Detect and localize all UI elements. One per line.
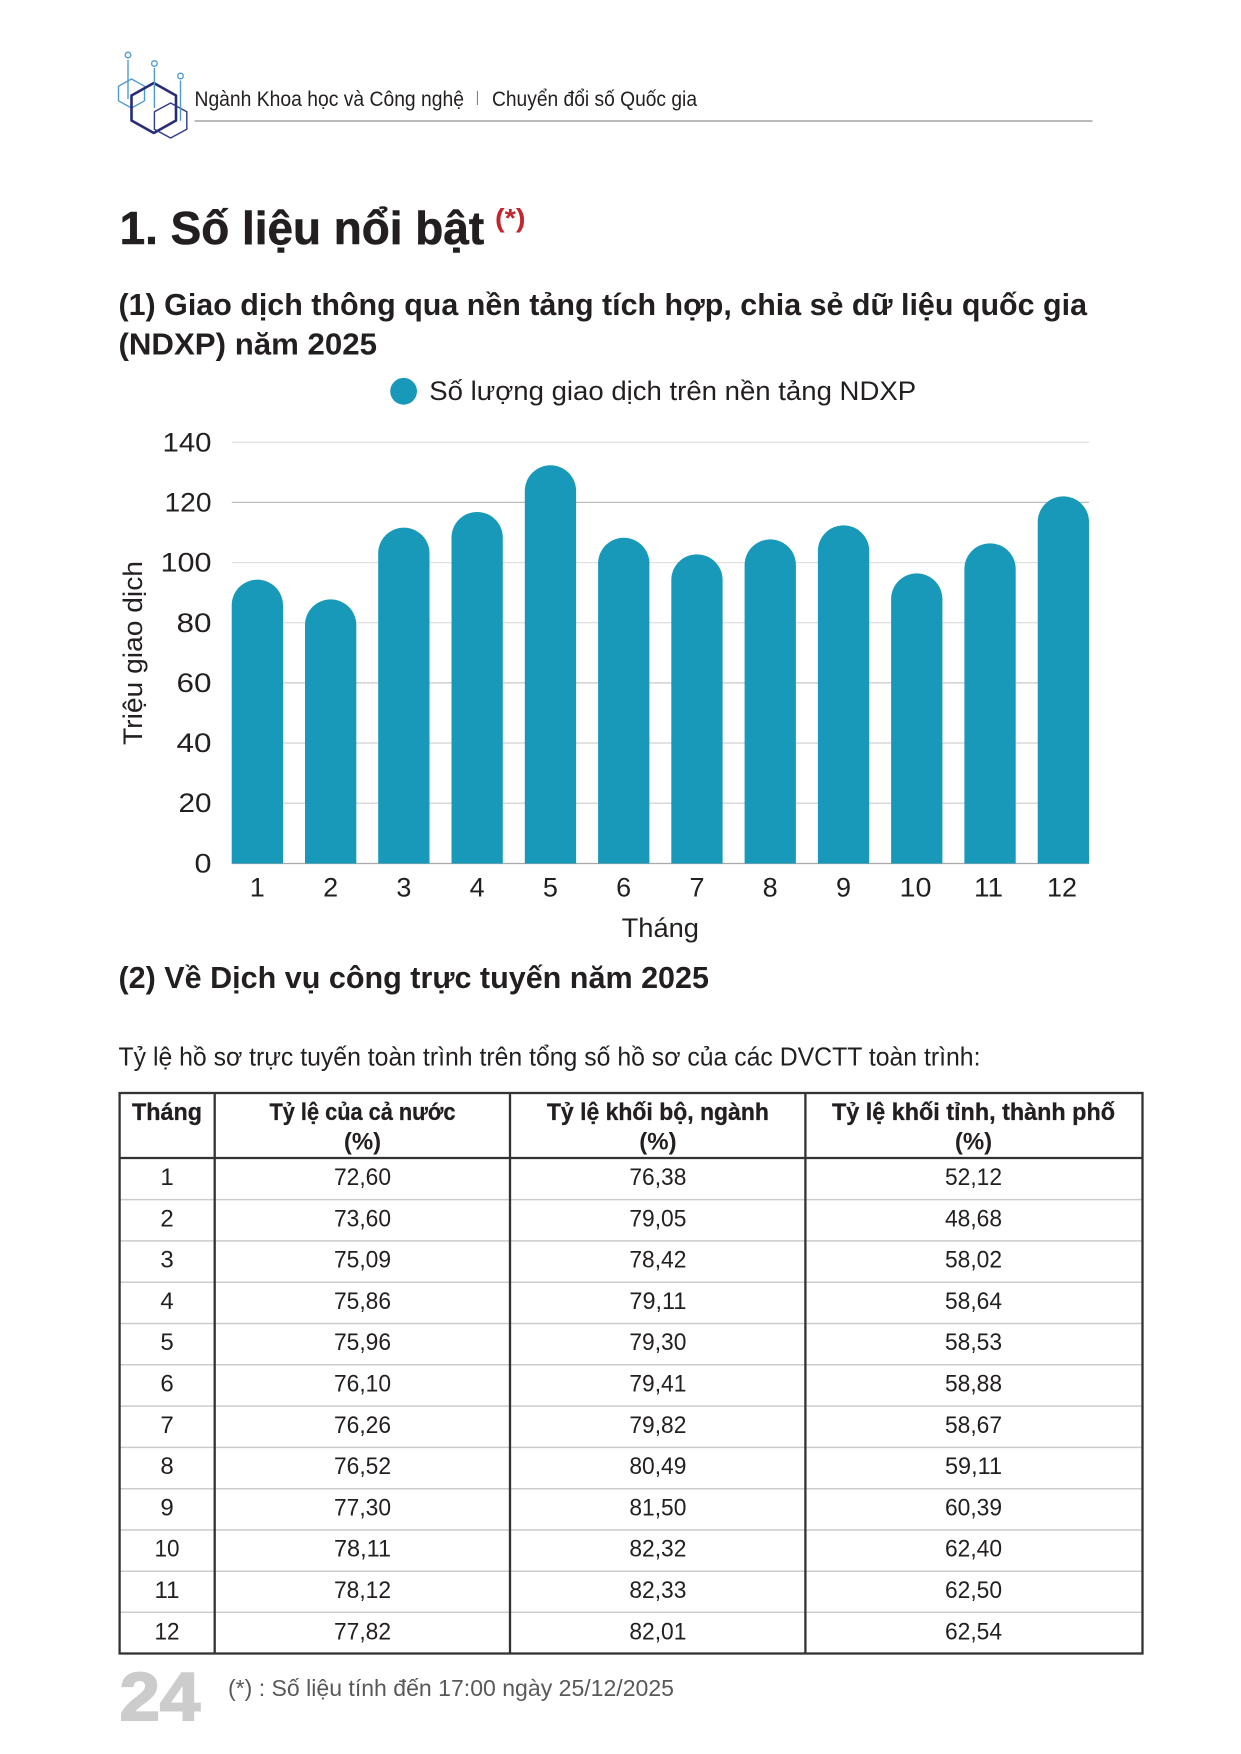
x axis labels: 10 bbox=[900, 872, 932, 902]
table header: Tỷ lệ khối bộ, ngành bbox=[547, 1099, 769, 1126]
table rows: 58,88 bbox=[945, 1370, 1002, 1398]
x axis labels: 1 bbox=[250, 872, 265, 902]
table rows: 58,67 bbox=[945, 1412, 1002, 1439]
y axis labels: 0 bbox=[194, 848, 212, 878]
table rows: 75,86 bbox=[334, 1288, 391, 1315]
table rows: 62,54 bbox=[945, 1618, 1002, 1645]
x axis labels: 4 bbox=[470, 872, 485, 902]
table header: Tỷ lệ khối tỉnh, thành phố bbox=[832, 1099, 1115, 1126]
table rows: 62,40 bbox=[945, 1536, 1002, 1563]
title: 1. Số liệu nổi bật bbox=[120, 202, 484, 254]
header text: sector: Ngành Khoa học và Công nghệ bbox=[194, 88, 464, 111]
x axis labels: 9 bbox=[836, 872, 851, 902]
table rows: 12 bbox=[154, 1618, 180, 1645]
table rows: 76,10 bbox=[334, 1370, 391, 1398]
table rows: 59,11 bbox=[945, 1453, 1002, 1480]
table rows: 82,33 bbox=[629, 1577, 686, 1604]
x axis title: Tháng bbox=[622, 913, 699, 943]
y axis labels: 100 bbox=[160, 548, 212, 578]
table rows: 9 bbox=[160, 1494, 174, 1521]
x axis labels: 6 bbox=[616, 872, 631, 902]
table rows: 75,96 bbox=[334, 1329, 391, 1356]
y axis labels: 40 bbox=[176, 728, 212, 758]
table rows: 80,49 bbox=[629, 1453, 686, 1480]
header bbox=[118, 52, 1092, 138]
table rows: 79,05 bbox=[629, 1205, 686, 1232]
x axis labels: 11 bbox=[974, 872, 1003, 902]
table rows: 78,12 bbox=[334, 1577, 391, 1604]
table rows: 8 bbox=[160, 1453, 174, 1480]
y axis labels: 20 bbox=[178, 788, 212, 818]
table rows: 60,39 bbox=[945, 1494, 1002, 1521]
footnote: (*) : Số liệu tính đến 17:00 ngày 25/12/2025 bbox=[228, 1675, 674, 1701]
heading: NDXP transactions: (NDXP) năm 2025 bbox=[118, 326, 377, 362]
table header: (%) bbox=[639, 1128, 677, 1156]
table rows: 82,32 bbox=[629, 1536, 686, 1563]
heading: online public services: (2) Về Dịch vụ công trực tuyến năm 2025 bbox=[118, 960, 709, 995]
table rows: 62,50 bbox=[945, 1577, 1002, 1604]
table rows: 75,09 bbox=[334, 1247, 391, 1274]
table rows: 76,26 bbox=[334, 1412, 391, 1439]
y axis labels: 140 bbox=[162, 428, 212, 458]
x axis labels bbox=[250, 872, 1077, 902]
table rows: 76,38 bbox=[629, 1164, 686, 1191]
bars bbox=[232, 465, 1089, 864]
table rows: 7 bbox=[160, 1412, 174, 1439]
table rows: 79,82 bbox=[629, 1412, 686, 1439]
table rows: 1 bbox=[160, 1164, 174, 1191]
heading: NDXP transactions: (1) Giao dịch thông qua nền tảng tích hợp, chia sẻ dữ liệu quốc gia bbox=[118, 287, 1088, 322]
table rows: 4 bbox=[160, 1288, 174, 1315]
y axis labels: 120 bbox=[164, 488, 212, 518]
table rows: 3 bbox=[160, 1247, 174, 1274]
table rows: 5 bbox=[160, 1329, 174, 1356]
table rows: 77,30 bbox=[334, 1494, 391, 1521]
y axis labels bbox=[160, 428, 212, 878]
table rows: 78,11 bbox=[334, 1536, 391, 1563]
table rows: 52,12 bbox=[945, 1164, 1002, 1191]
table rows: 76,52 bbox=[334, 1453, 391, 1480]
icon: hexagon logo bbox=[118, 52, 187, 138]
legend: Số lượng giao dịch trên nền tảng NDXP bbox=[429, 376, 916, 406]
table rows: 6 bbox=[160, 1370, 174, 1398]
x axis labels: 12 bbox=[1047, 872, 1077, 902]
table rows: 82,01 bbox=[629, 1618, 686, 1645]
table rows: 58,64 bbox=[945, 1288, 1002, 1315]
table rows: 2 bbox=[160, 1205, 174, 1232]
bar chart: NDXP transactions per month bbox=[118, 376, 1089, 943]
y axis labels: 60 bbox=[176, 668, 212, 698]
table rows: 48,68 bbox=[945, 1205, 1002, 1232]
table rows: 81,50 bbox=[629, 1494, 686, 1521]
table rows: 72,60 bbox=[334, 1164, 391, 1191]
x axis labels: 7 bbox=[689, 872, 705, 902]
table rows: 79,30 bbox=[629, 1329, 686, 1356]
x axis labels: 5 bbox=[543, 872, 558, 902]
table rows bbox=[154, 1164, 1002, 1645]
table rows: 11 bbox=[154, 1577, 180, 1604]
table rows: 78,42 bbox=[629, 1247, 686, 1274]
table rows: 10 bbox=[154, 1536, 180, 1563]
table header: (%) bbox=[344, 1128, 381, 1156]
x axis labels: 3 bbox=[396, 872, 411, 902]
y axis labels: 80 bbox=[176, 608, 212, 638]
table rows: 79,41 bbox=[629, 1370, 686, 1398]
title: (*) bbox=[495, 203, 526, 233]
heading: NDXP transactions bbox=[118, 287, 1088, 362]
table header: (%) bbox=[955, 1128, 992, 1156]
table rows: 79,11 bbox=[629, 1288, 686, 1315]
table rows: 58,53 bbox=[945, 1329, 1002, 1356]
table rows: 58,02 bbox=[945, 1247, 1002, 1274]
table rows: 73,60 bbox=[334, 1205, 391, 1232]
table: monthly online dossier rates bbox=[120, 1093, 1143, 1654]
header text: programme: Chuyển đổi số Quốc gia bbox=[492, 88, 697, 111]
x axis labels: 2 bbox=[323, 872, 338, 902]
table header: Tháng bbox=[132, 1099, 202, 1126]
page number: 24 bbox=[120, 1659, 200, 1735]
table intro text: Tỷ lệ hồ sơ trực tuyến toàn trình trên tổng số hồ sơ của các DVCTT toàn trình: bbox=[118, 1042, 980, 1072]
x axis labels: 8 bbox=[763, 872, 778, 902]
y axis title: Triệu giao dịch bbox=[118, 561, 148, 745]
table header bbox=[132, 1099, 1115, 1156]
table rows: 77,82 bbox=[334, 1618, 391, 1645]
table header: Tỷ lệ của cả nước bbox=[270, 1099, 456, 1126]
